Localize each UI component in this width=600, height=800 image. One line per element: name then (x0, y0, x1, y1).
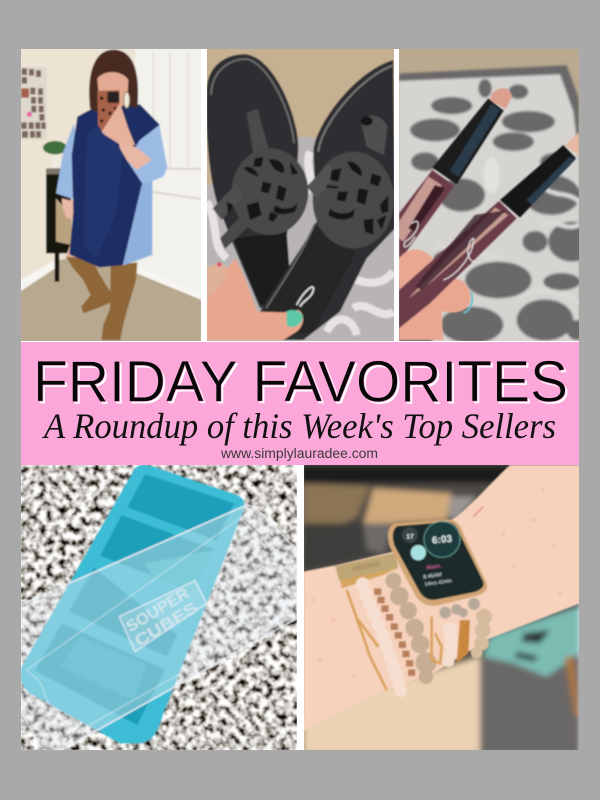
carpet and rug (399, 49, 579, 341)
banner: pink title band (21, 342, 579, 465)
blurred floor background (300, 460, 580, 755)
lipstick one (399, 88, 512, 262)
gold bar: VINTAGE (352, 560, 382, 573)
subtitle script: A Roundup of this Week's Top Sellers (42, 406, 556, 446)
photo: Apple Watch with beaded gold bracelet stack on wrist (300, 460, 580, 755)
right sandal sole (260, 60, 395, 340)
watch: 14hrs 41min (424, 578, 452, 588)
hand (206, 258, 303, 340)
phone (97, 90, 120, 133)
hand (399, 249, 471, 340)
light panel (123, 180, 152, 266)
right medallion (307, 152, 394, 248)
watch face dial (424, 521, 460, 557)
photo: two shimmer lipstick sticks over a grey damask rug (399, 49, 579, 341)
gold bar (335, 553, 398, 588)
left sandal sole (206, 54, 298, 308)
left sleeve (56, 123, 78, 199)
nail (287, 310, 303, 327)
lid embossed text: SOUPER (124, 585, 193, 636)
boots (65, 256, 137, 340)
watch: 17 (406, 534, 414, 541)
lid (20, 505, 297, 751)
watch: 6:03 (432, 534, 453, 547)
watch: Alarm, (426, 563, 442, 571)
watch: 8:45AM (423, 572, 442, 581)
toe post straps (247, 108, 268, 153)
stacks of beads (356, 577, 407, 697)
arm (303, 465, 580, 732)
granite counter (21, 465, 297, 750)
lipstick two (399, 132, 579, 328)
dress body (69, 104, 160, 267)
lid embossed text: CUBES (132, 599, 201, 650)
table and plant (43, 141, 72, 282)
hair and face (89, 50, 138, 112)
photo: black medallion thong sandals held in hand (203, 45, 400, 345)
title: Friday Favorites: FRIDAY FAVORITES (35, 352, 570, 416)
photo: woman in blue shirt dress and brown boots (20, 45, 207, 345)
photo wall (21, 67, 47, 140)
tray (20, 465, 244, 743)
chain bracelet (347, 590, 387, 690)
photo: blue Souper Cubes tray with clear lid on granite (20, 465, 297, 751)
logo script on insole (297, 287, 313, 307)
title: Friday Favorites: FRIDAY FAVORITES (33, 350, 568, 414)
watch (388, 519, 487, 606)
website url: www.simplylauradee.com (220, 446, 378, 461)
left medallion (213, 148, 308, 249)
right sleeve (127, 125, 167, 185)
